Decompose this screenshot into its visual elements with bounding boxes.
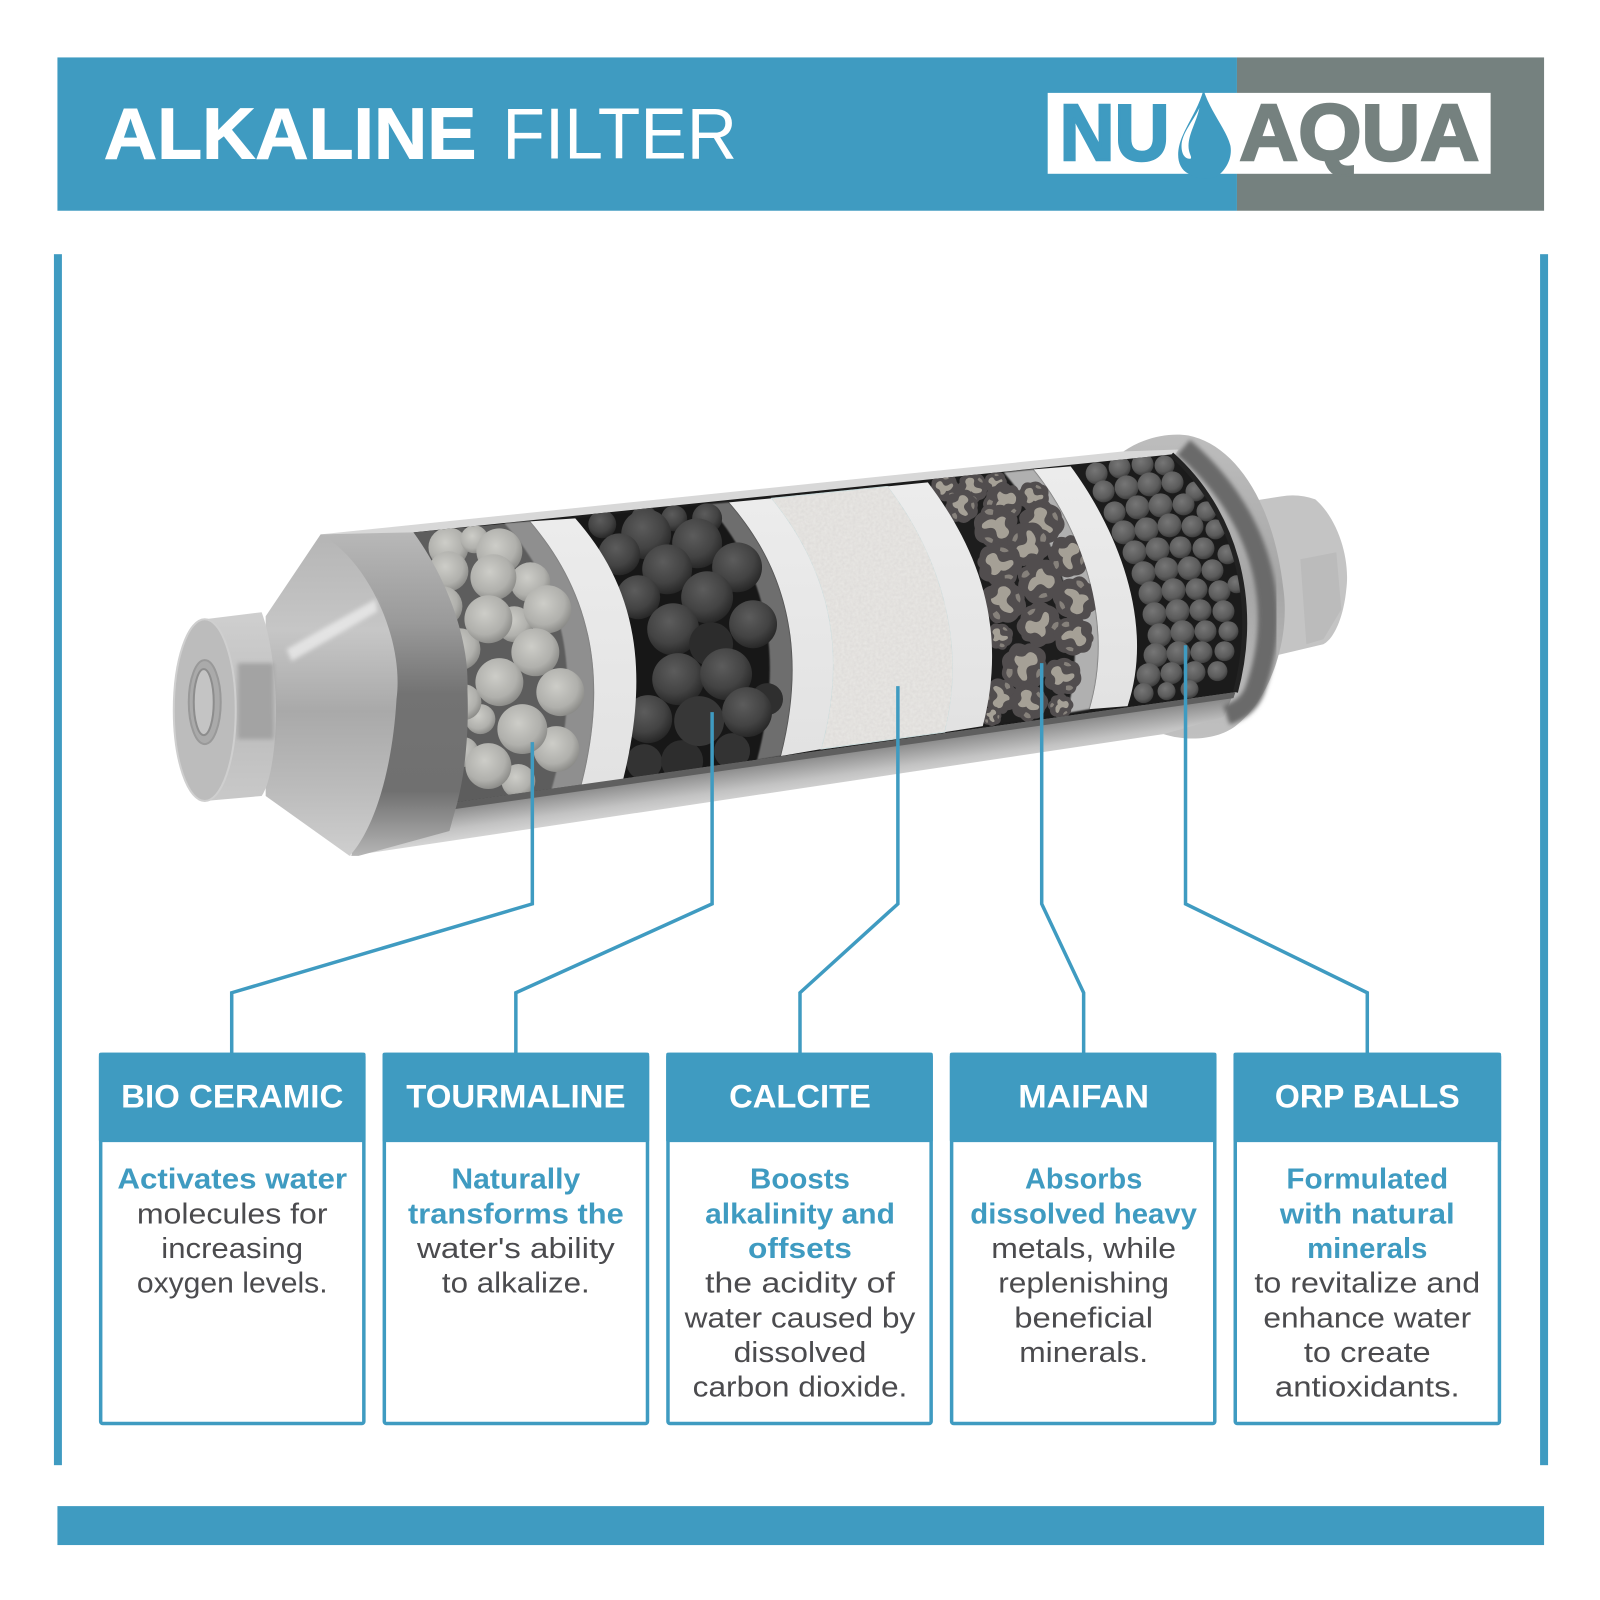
panel: maifan: replenishing bbox=[998, 1267, 1169, 1299]
panel: calcite: Boosts bbox=[750, 1164, 850, 1196]
nozzle inner rings bbox=[189, 660, 221, 744]
panel: calcite: offsets bbox=[748, 1233, 852, 1265]
panel: tourmaline: TOURMALINE bbox=[406, 1078, 625, 1114]
footer bar bbox=[57, 1506, 1544, 1545]
window end shadow bbox=[1172, 454, 1245, 692]
panel: bio ceramic bbox=[99, 1053, 366, 1424]
panel: ORP balls: to revitalize and bbox=[1254, 1267, 1480, 1299]
panel: bio ceramic: Activates water bbox=[117, 1164, 347, 1196]
section: bio ceramic bbox=[413, 521, 594, 802]
window bottom lip bbox=[455, 692, 1235, 809]
panel: ORP balls: to create bbox=[1304, 1337, 1431, 1369]
nozzle end bbox=[174, 619, 236, 801]
flange dark band bbox=[1184, 447, 1268, 715]
panel: bio ceramic: molecules for bbox=[137, 1198, 328, 1230]
panel: calcite: water caused by bbox=[684, 1302, 916, 1334]
panel: bio ceramic: increasing bbox=[161, 1233, 303, 1265]
section: calcite bbox=[771, 486, 953, 749]
title: FILTER bbox=[502, 94, 737, 174]
panel: maifan: beneficial bbox=[1014, 1302, 1153, 1334]
nozzle shaded patch bbox=[238, 663, 274, 739]
panel: tourmaline: to alkalize. bbox=[442, 1267, 590, 1299]
panel: calcite bbox=[666, 1053, 933, 1424]
section: tourmaline bbox=[575, 502, 793, 782]
panel: ORP balls: ORP BALLS bbox=[1275, 1078, 1460, 1114]
logo: Nu Aqua bbox=[1048, 88, 1491, 178]
panel: maifan: dissolved heavy bbox=[970, 1198, 1197, 1230]
right flange bbox=[1124, 435, 1285, 738]
panel: maifan: minerals. bbox=[1019, 1337, 1148, 1369]
panel: ORP balls: minerals bbox=[1307, 1233, 1427, 1265]
panel: ORP balls: antioxidants. bbox=[1275, 1371, 1460, 1403]
panel: calcite: alkalinity and bbox=[705, 1198, 895, 1230]
panel: calcite: carbon dioxide. bbox=[693, 1371, 907, 1403]
panel: maifan bbox=[950, 1053, 1216, 1424]
cone highlight bbox=[287, 599, 378, 661]
cutaway window bbox=[413, 454, 1245, 802]
tube upper wall bbox=[321, 449, 1179, 538]
panel: ORP balls bbox=[1233, 1053, 1501, 1424]
panel: maifan: metals, while bbox=[991, 1233, 1176, 1265]
panel: ORP balls: Formulated bbox=[1286, 1164, 1448, 1196]
left cap bbox=[174, 532, 468, 856]
logo: Nu Aqua: AQUA bbox=[1239, 88, 1479, 177]
panel: tourmaline: Naturally bbox=[451, 1164, 580, 1196]
panel: tourmaline bbox=[383, 1053, 649, 1424]
panel: tourmaline: water's ability bbox=[416, 1233, 615, 1265]
panel: bio ceramic: BIO CERAMIC bbox=[121, 1078, 343, 1114]
right frame bar bbox=[1540, 254, 1548, 1465]
panel: tourmaline: transforms the bbox=[408, 1198, 624, 1230]
panel: ORP balls: with natural bbox=[1279, 1198, 1455, 1230]
panel: calcite: the acidity of bbox=[705, 1267, 896, 1299]
panel: maifan: MAIFAN bbox=[1018, 1078, 1149, 1114]
section: maifan bbox=[928, 466, 1106, 729]
logo: Nu Aqua: NU bbox=[1060, 88, 1170, 177]
section: ORP balls bbox=[1086, 453, 1245, 703]
panel: bio ceramic: oxygen levels. bbox=[137, 1267, 328, 1299]
filter cartridge illustration bbox=[174, 435, 1347, 856]
nozzle body bbox=[205, 612, 276, 801]
panel: maifan: Absorbs bbox=[1025, 1164, 1142, 1196]
cap band bbox=[321, 532, 468, 856]
panel: calcite: dissolved bbox=[734, 1337, 866, 1369]
cone bbox=[266, 534, 398, 856]
separator rings bbox=[530, 466, 1137, 786]
panel: calcite: CALCITE bbox=[729, 1078, 871, 1114]
panel: ORP balls: enhance water bbox=[1263, 1302, 1472, 1334]
right nozzle bbox=[1243, 495, 1347, 659]
title: ALKALINE bbox=[104, 94, 476, 174]
leader lines bbox=[232, 645, 1367, 1054]
tube lower wall bbox=[350, 689, 1235, 856]
header banner bbox=[57, 57, 1544, 211]
left frame bar bbox=[54, 254, 62, 1465]
